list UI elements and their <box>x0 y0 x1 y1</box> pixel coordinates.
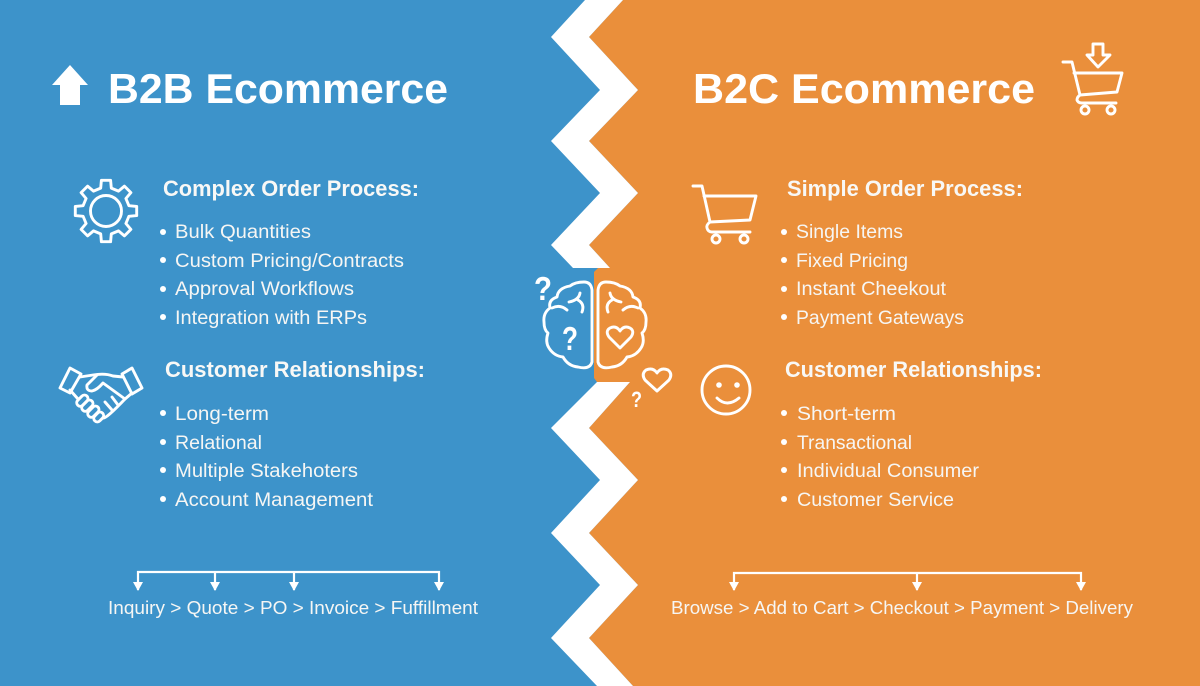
flow arrows <box>133 572 444 591</box>
heading: complex order process: Complex Order Process: <box>163 176 419 201</box>
list: relationships: Individual Consumer <box>797 461 980 482</box>
list: relationships: Relational <box>175 433 262 454</box>
panel: B2B <box>52 65 478 618</box>
list: order process <box>160 222 404 329</box>
list: relationships: Account Management <box>175 490 374 511</box>
heading: customer relationships: Customer Relationships: <box>785 357 1042 382</box>
list: order process: Custom Pricing/Contracts <box>175 251 404 272</box>
list: order process: Bulk Quantities <box>175 222 311 243</box>
icon: central brain <box>534 270 671 412</box>
list: relationships: Customer Service <box>797 490 954 511</box>
list: order process: Instant Cheekout <box>796 279 947 300</box>
icon: smiley <box>702 366 750 414</box>
white zigzag divider bottom <box>551 382 638 686</box>
title: B2B: B2B Ecommerce <box>108 65 448 112</box>
white zigzag divider top <box>551 0 638 268</box>
question mark outside left: ? <box>534 270 552 307</box>
panel: B2C <box>671 44 1134 618</box>
brain left hemisphere <box>544 282 592 368</box>
list: relationships <box>781 404 980 511</box>
list: order process: Fixed Pricing <box>796 251 908 272</box>
heading: simple order process: Simple Order Process: <box>787 176 1023 201</box>
icon: handshake <box>60 368 142 423</box>
list: order process: Payment Gateways <box>796 308 964 329</box>
title: B2C: B2C Ecommerce <box>693 65 1035 112</box>
list: order process <box>781 222 964 329</box>
list: relationships: Multiple Stakehoters <box>175 461 358 482</box>
list: relationships: Long-term <box>175 404 269 425</box>
icon: cart <box>693 186 756 243</box>
list: relationships: Transactional <box>797 433 912 454</box>
heart outside <box>643 369 671 391</box>
question mark inside brain: ? <box>562 320 578 357</box>
list: order process: Approval Workflows <box>175 279 354 300</box>
brain right hemisphere <box>598 282 646 368</box>
list: relationships <box>160 404 374 511</box>
icon: cart with down arrow <box>1063 44 1122 114</box>
list: relationships: Short-term <box>797 404 896 425</box>
icon: up arrow <box>52 65 88 105</box>
orange background <box>589 0 1200 686</box>
list: order process: Single Items <box>796 222 903 243</box>
question mark small: ? <box>631 387 642 412</box>
flow text: Browse > Add to Cart > Checkout > Payment > Delivery <box>671 597 1134 618</box>
list: order process: Integration with ERPs <box>175 308 367 329</box>
flow text: Inquiry > Quote > PO > Invoice > Fuffillment <box>108 597 478 618</box>
heart inside brain <box>607 327 633 348</box>
icon: gear <box>75 180 137 242</box>
heading: customer relationships: Customer Relationships: <box>165 357 425 382</box>
flow arrows <box>729 573 1086 591</box>
